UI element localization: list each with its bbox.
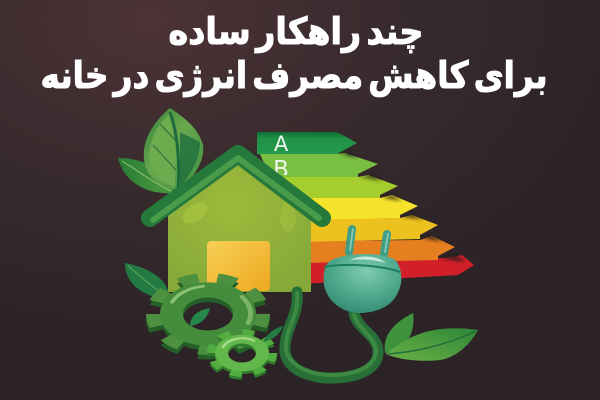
title: چند راهکار ساده — [168, 10, 424, 53]
door — [207, 241, 270, 291]
icon: large top leaves — [118, 108, 203, 193]
bar tip shadows — [340, 152, 466, 262]
icon: bottom right leaves — [385, 313, 478, 361]
wall highlights — [179, 198, 211, 228]
icon: leaf by small gear — [263, 326, 283, 342]
icon: leaf inside gear — [190, 308, 210, 326]
plug body — [324, 254, 401, 313]
bar G red — [300, 255, 474, 284]
gear face — [153, 278, 263, 350]
label A: A — [274, 132, 289, 156]
long leaf — [386, 328, 478, 361]
bar B green — [260, 153, 378, 177]
bar F orange — [300, 236, 455, 263]
energy rating bars — [257, 132, 474, 284]
big leaf — [144, 108, 203, 190]
small gear face — [211, 332, 273, 374]
bar D yellow — [280, 195, 418, 220]
leaf vein — [388, 331, 476, 354]
icon: large gear — [153, 278, 263, 355]
house — [150, 154, 322, 292]
small left leaf — [118, 158, 175, 193]
icon: lower left leaf — [125, 263, 169, 299]
title: برای کاهش مصرف انرژی در خانه — [40, 54, 548, 97]
icon: power cord — [285, 292, 378, 378]
title — [40, 10, 548, 97]
small gear depth — [211, 335, 273, 377]
plug seam — [324, 265, 400, 272]
label B: B — [273, 157, 289, 183]
icon: plug — [324, 229, 401, 313]
bar C lime — [270, 175, 398, 198]
bar E amber — [300, 215, 438, 242]
plug prongs — [349, 229, 388, 254]
plug highlight — [350, 256, 386, 263]
icon: small gear — [211, 332, 273, 377]
roof — [150, 154, 322, 218]
house wall — [168, 158, 311, 292]
gear depth — [153, 282, 263, 355]
upper small leaf — [385, 313, 413, 353]
bar A dark green — [257, 132, 357, 154]
